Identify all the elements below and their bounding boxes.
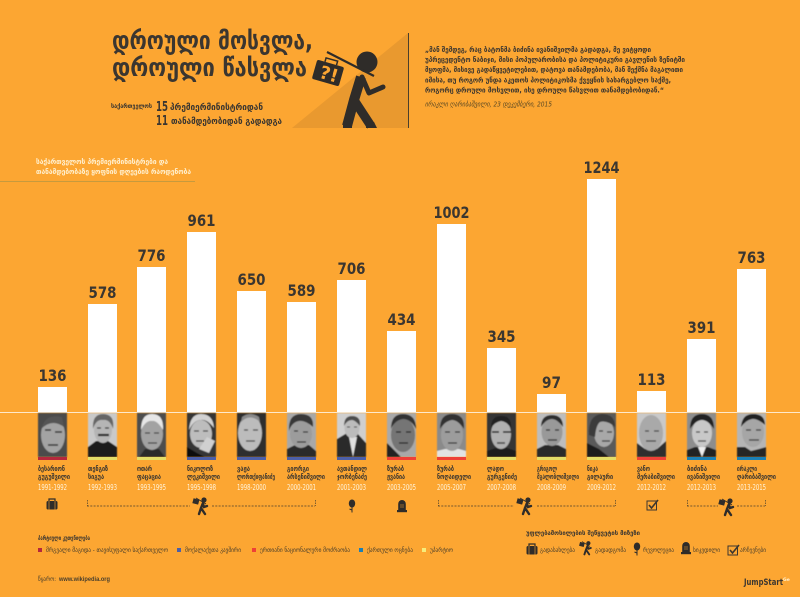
prime minister names and years: გიორგი xyxy=(287,465,309,473)
reason legend: გადადგომა xyxy=(595,547,626,554)
portrait 8 xyxy=(387,413,416,460)
prime minister names and years: 2009-2012 xyxy=(587,483,616,492)
quote: უპრეცედენტო ნაბიჯი, მისი პოპულარობისა და პოლიტიკური გავლენის ზენიტში xyxy=(425,56,685,64)
prime minister names and years: გილაური xyxy=(587,473,613,481)
portrait 15 xyxy=(737,413,766,460)
portrait 11 xyxy=(537,413,566,460)
party legend: მრგვალი მაგიდა - თავისუფალი საქართველო xyxy=(46,547,168,554)
quote: „მან შემდეგ, რაც ბატონმა ბიძინა ივანიშვილმა გადადგა, მე ვიტყოდი xyxy=(425,46,651,54)
bar chart: days in office: 776 xyxy=(138,246,166,265)
bar chart: days in office: 578 xyxy=(88,283,116,302)
prime minister names and years: ივანიშვილი xyxy=(687,473,720,481)
portrait 5 xyxy=(237,413,266,460)
illustration: man leaving with suitcase: ?! xyxy=(317,62,341,87)
party legend: ერთიანი ნაციონალური მოძრაობა xyxy=(260,547,350,554)
quote: როგორც დროული მოსვლით, ისე დროული წასვლით თანამდებობიდან.“ xyxy=(425,86,664,94)
bar chart: days in office: 434 xyxy=(388,310,416,329)
quote xyxy=(425,46,685,108)
subtitle: თანამდებობიდან გადადგა xyxy=(171,117,282,127)
prime minister names and years: არსენიშვილი xyxy=(287,473,325,481)
bar chart: days in office: 1244 xyxy=(584,158,620,177)
reason legend: გადასახლება xyxy=(540,547,575,554)
prime minister names and years: 2007-2008 xyxy=(487,483,516,492)
bar chart: days in office: 589 xyxy=(288,281,316,300)
reason legend: უფლებამოსილების შეწყვეტის მიზეზი xyxy=(526,529,640,537)
quote: ირაკლი ღარიბაშვილი, 23 დეკემბერი, 2015 xyxy=(425,100,552,108)
portrait 14 xyxy=(687,413,716,460)
prime minister names and years: 2012-2013 xyxy=(687,483,716,492)
subtitle: საქართველოს xyxy=(111,102,152,110)
bar chart: days in office: 961 xyxy=(188,211,216,230)
prime minister names and years: ზურაბ xyxy=(437,465,454,473)
subtitle: 11 xyxy=(156,114,168,129)
prime minister names and years: 1998-2000 xyxy=(237,483,266,492)
prime minister names and years: ბესარიონ xyxy=(38,465,65,473)
chart heading xyxy=(0,158,195,182)
party legend xyxy=(38,534,453,554)
prime minister names and years: ირაკლი xyxy=(737,465,757,473)
prime minister names and years: 1991-1992 xyxy=(38,483,67,492)
bar chart: days in office: 97 xyxy=(542,373,561,392)
source: www.wikipedia.org xyxy=(58,576,110,583)
prime minister names and years: ღარიბაშვილი xyxy=(737,473,776,481)
bar chart: days in office xyxy=(0,158,800,412)
subtitle: პრემიერმინისტრიდან xyxy=(170,102,263,113)
prime minister names and years: ნოღაიდელი xyxy=(437,473,471,481)
portrait 1 xyxy=(38,413,67,460)
prime minister names and years: 1992-1993 xyxy=(88,483,117,492)
logo: JumpStart: JumpStart xyxy=(743,578,784,588)
party legend: უპარტიო xyxy=(430,547,453,554)
prime minister names and years: 2005-2007 xyxy=(437,483,466,492)
reason legend xyxy=(526,529,766,556)
subtitle: 15 xyxy=(156,100,168,115)
illustration: man leaving with suitcase xyxy=(292,33,408,128)
party legend: პარტიული კუთვნილება xyxy=(38,534,90,542)
prime minister names and years: ლეკიშვილი xyxy=(187,473,220,481)
chart heading: თანამდებობაზე ყოფნის დღეების რაოდენობა xyxy=(36,168,191,176)
portrait 12 xyxy=(587,413,616,460)
prime minister names and years: 1995-1998 xyxy=(187,483,216,492)
prime minister names and years: 2013-2015 xyxy=(737,483,766,492)
reason legend: სიკვდილი xyxy=(693,547,720,554)
quote: იმისა, თუ როგორ უნდა აკეთოს პოლიტიკოსმა ქვეყნის სასარგებლო საქმე, xyxy=(425,76,671,84)
prime minister names and years: ზურაბ xyxy=(387,465,404,473)
logo: JumpStart: Ge xyxy=(783,577,790,583)
prime minister names and years: ბიძინა xyxy=(687,465,707,473)
prime minister names and years: მგალობლიშვილი xyxy=(537,473,579,481)
portrait 9 xyxy=(437,413,466,460)
prime minister names and years: ვაჟა xyxy=(237,465,250,473)
party legend: ქართული ოცნება xyxy=(367,547,413,554)
bar chart: days in office: 136 xyxy=(38,366,66,385)
prime minister names and years: 1993-1995 xyxy=(137,483,166,492)
portrait 2 xyxy=(88,413,117,460)
prime minister names and years: ვანო xyxy=(637,465,650,473)
prime minister names and years: ჟვანია xyxy=(387,473,405,481)
reason legend: რევოლუცია xyxy=(643,547,674,554)
prime minister names and years xyxy=(38,465,776,492)
quote: მყოფმა, მისივე გადაწყვეტილებით, დატოვა თანამდებობა, მან შექმნა მაგალითი xyxy=(425,66,683,74)
prime minister names and years: სიგუა xyxy=(88,473,104,481)
reason legend: არჩევნები xyxy=(740,547,766,554)
prime minister names and years: გუგუშვილი xyxy=(38,473,70,481)
bar chart: days in office: 113 xyxy=(638,370,666,389)
prime minister names and years: მერაბიშვილი xyxy=(637,473,675,481)
bar chart: days in office: 345 xyxy=(488,327,516,346)
portrait 3 xyxy=(137,413,166,460)
prime minister names and years: ავთანდილ xyxy=(337,465,367,473)
prime minister names and years: 2000-2001 xyxy=(287,483,316,492)
prime minister names and years: ნიკა xyxy=(587,465,598,473)
prime minister names and years: ჯორბენაძე xyxy=(337,473,367,481)
party legend: მოქალაქეთა კავშირი xyxy=(185,547,241,554)
prime minister names and years: ლადო xyxy=(487,465,504,473)
prime minister names and years: 2001-2003 xyxy=(337,483,366,492)
bar chart: days in office: 650 xyxy=(238,270,266,289)
bar chart: days in office: 1002 xyxy=(434,203,470,222)
portrait 13 xyxy=(637,413,666,460)
portrait 7 xyxy=(337,413,366,460)
portrait 4 xyxy=(187,413,216,460)
prime minister names and years: 2012-2012 xyxy=(637,483,666,492)
prime minister names and years: 2008-2009 xyxy=(537,483,566,492)
portrait 10 xyxy=(487,413,516,460)
source: წყარო: xyxy=(38,576,56,583)
bar chart: days in office: 391 xyxy=(688,318,716,337)
reason row: end-of-term icons and brackets xyxy=(46,497,766,515)
prime minister names and years: ლორთქიფანიძე xyxy=(237,473,275,481)
prime minister names and years: ოთარ xyxy=(137,465,152,473)
subtitle xyxy=(111,100,282,129)
portrait 6 xyxy=(287,413,316,460)
title xyxy=(112,26,313,82)
prime minister names and years: ფაცაცია xyxy=(137,473,161,481)
bar chart: days in office: 763 xyxy=(738,248,766,267)
prime minister names and years: თენგიზ xyxy=(88,465,108,473)
title: დროული მოსვლა, xyxy=(112,26,313,55)
chart heading: საქართველოს პრემიერმინისტრები და xyxy=(36,158,168,166)
prime minister names and years: 2003-2005 xyxy=(387,483,416,492)
prime minister names and years: გრიგოლ xyxy=(537,465,557,473)
source xyxy=(38,576,110,583)
bar chart: days in office: 706 xyxy=(338,259,366,278)
title: დროული წასვლა xyxy=(112,53,307,82)
prime minister names and years: ნიკოლოზ xyxy=(187,465,213,473)
prime minister names and years: გურგენიძე xyxy=(487,473,517,481)
